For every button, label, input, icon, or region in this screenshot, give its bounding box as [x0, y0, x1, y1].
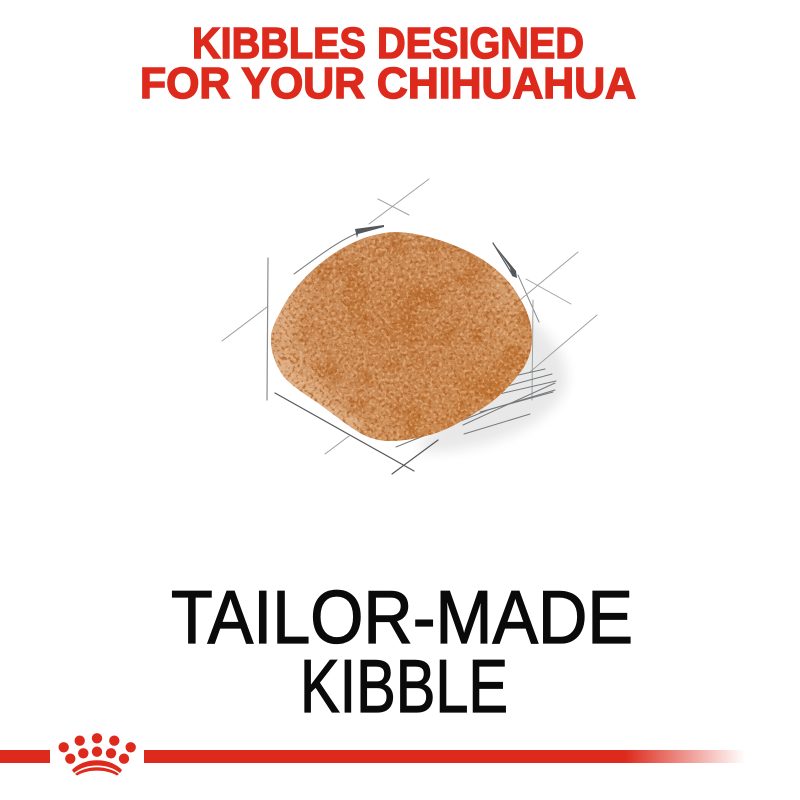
heading: tailor-made kibble — [171, 575, 633, 728]
kibble illustration — [222, 179, 597, 474]
kibble shadow — [419, 315, 567, 452]
icon: royal canin crown — [58, 733, 136, 776]
kibble body — [271, 232, 532, 441]
arrow heads — [355, 225, 384, 238]
title: kibbles designed for your chihuahua — [140, 19, 636, 108]
sketch lines — [222, 179, 597, 474]
heading: tailor-made kibble: TAILOR-MADE — [171, 575, 633, 659]
title: kibbles designed for your chihuahua: KIBBLES DESIGNED — [192, 19, 584, 68]
red footer bar — [0, 750, 745, 763]
heading: tailor-made kibble: KIBBLE — [300, 644, 508, 728]
title: kibbles designed for your chihuahua: FOR YOUR CHIHUAHUA — [140, 59, 636, 108]
